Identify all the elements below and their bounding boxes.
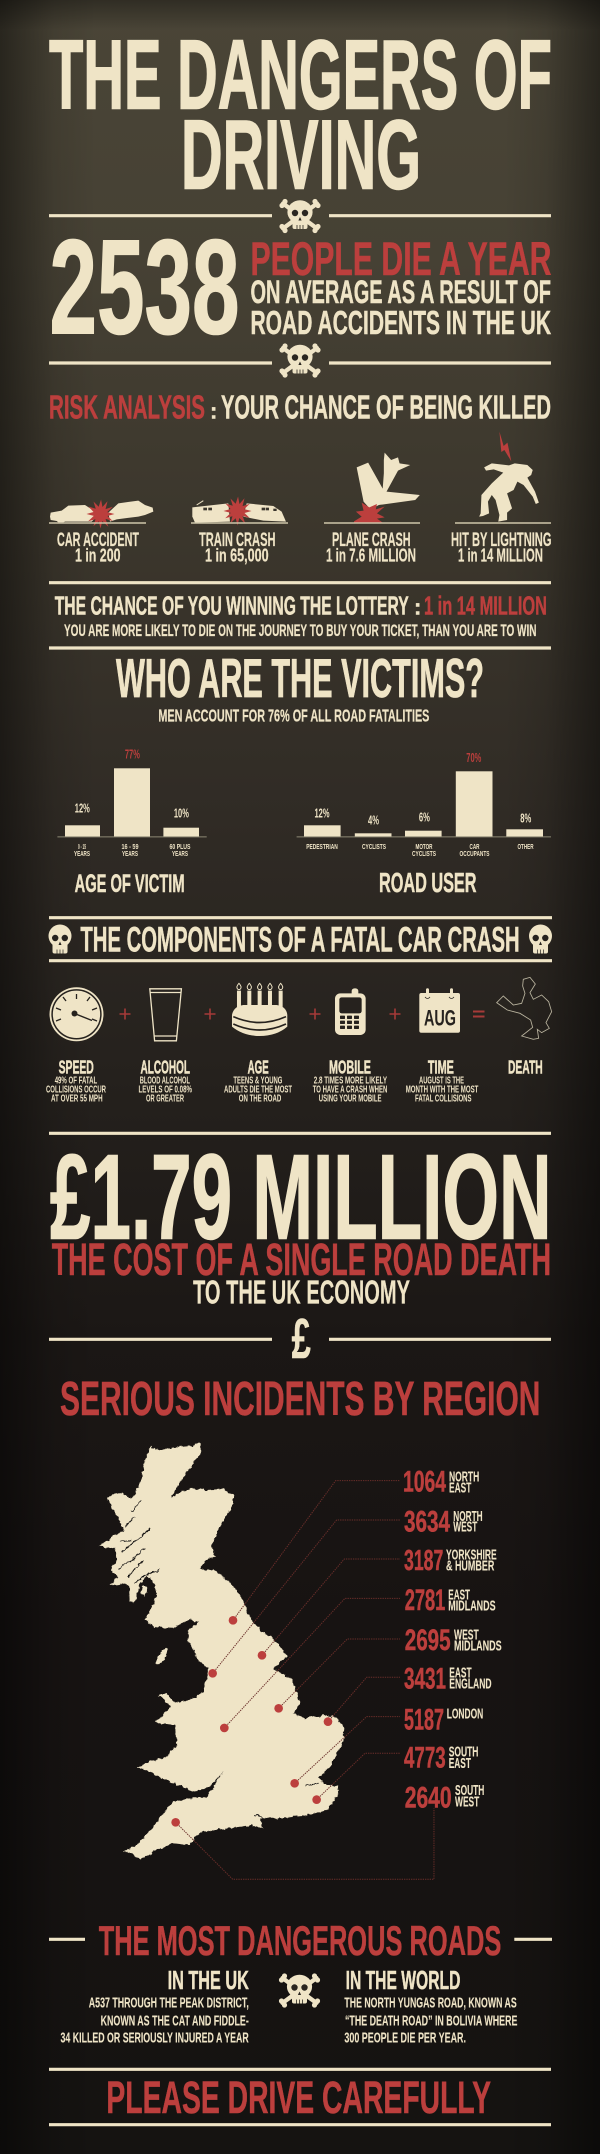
icon: skull right [529, 924, 552, 954]
title [49, 20, 552, 210]
label: 1 in 7.6 MILLION [326, 546, 416, 566]
label: CAR ACCIDENT [57, 529, 139, 551]
bar chart: road user: CYCLISTS [362, 842, 386, 851]
bar chart: age of victim: 0 - 15 [78, 842, 86, 851]
region: east midlands: MIDLANDS [448, 1599, 496, 1615]
heading: risk analysis: RISK ANALYSIS [49, 389, 205, 426]
bar chart: age of victim: YEARS [74, 849, 90, 858]
bar chart: age of victim: 16 - 59 [122, 842, 138, 851]
operator: plus [310, 1008, 320, 1020]
statistic: 2538 deaths [50, 211, 552, 362]
statistic: cost of a road death [50, 1130, 552, 1311]
dangerous road: in the UK: A537 THROUGH THE PEAK DISTRICT, [89, 1995, 249, 2011]
operator: plus [204, 1008, 216, 1020]
label: FATAL COLLISIONS [415, 1094, 472, 1105]
lottery comparison [55, 590, 547, 640]
region: north west: WEST [453, 1520, 477, 1536]
statistic: 2538 deaths: 2538 [50, 211, 240, 362]
icon: crashing train [191, 496, 288, 526]
statistic: cost of a road death: TO THE UK ECONOMY [193, 1274, 410, 1311]
icon: mobile phone [335, 988, 366, 1035]
region: east midlands: EAST [448, 1587, 470, 1603]
icon: pint glass [150, 989, 181, 1041]
region: east england: ENGLAND [449, 1677, 492, 1693]
region: south west: 2640 [405, 1781, 452, 1814]
bar chart: age of victim [57, 746, 207, 898]
dangerous road: in the UK [60, 1965, 249, 2047]
region: east england: EAST [449, 1665, 472, 1681]
region: east england: 3431 [404, 1663, 446, 1696]
label: 49% OF FATAL [55, 1075, 97, 1086]
label: MOBILE [329, 1057, 371, 1077]
label [57, 529, 139, 566]
chart title: AGE OF VICTIM [75, 870, 185, 898]
bar chart: road user: 8% [520, 811, 532, 826]
region: yorkshire and humber: 3187 [404, 1545, 443, 1577]
label: 1 in 65,000 [205, 546, 269, 566]
dangerous road: in the world: IN THE WORLD [346, 1965, 460, 1995]
label: ALCOHOL [140, 1057, 190, 1077]
region: south east: EAST [449, 1756, 471, 1772]
risk: car accident [49, 500, 153, 566]
label: 2.8 TIMES MORE LIKELY [314, 1075, 387, 1086]
heading: who are the victims: MEN ACCOUNT FOR 76% OF ALL ROAD FATALITIES [158, 706, 429, 726]
label: 1 in 14 MILLION [458, 546, 543, 566]
component: speed [46, 987, 106, 1105]
icon: pound sign: £ [292, 1307, 311, 1371]
map: Great Britain [98, 1443, 344, 1860]
region: london: 5187 [404, 1703, 444, 1736]
bar chart: road user: 4% [368, 812, 379, 827]
dangerous road: in the UK: IN THE UK [168, 1965, 249, 1995]
region: west midlands [405, 1624, 502, 1657]
label: AGE [248, 1057, 269, 1077]
chart title: ROAD USER [379, 867, 477, 898]
icon: birthday cake [232, 983, 287, 1036]
label [199, 529, 276, 566]
region: south east: SOUTH [449, 1745, 478, 1761]
title: DRIVING [181, 100, 421, 210]
bar chart: road user [297, 750, 551, 898]
component: age [224, 983, 292, 1105]
dangerous road: in the world: 300 PEOPLE DIE PER YEAR. [344, 2031, 466, 2047]
dangerous road: in the UK: 34 KILLED OR SERIOUSLY INJURED A YEAR [60, 2031, 249, 2047]
label [138, 1057, 192, 1105]
heading: risk analysis: : [210, 398, 217, 423]
component: mobile [313, 988, 387, 1105]
label: DEATH [508, 1057, 543, 1077]
region: yorkshire and humber: YORKSHIRE [446, 1547, 497, 1563]
label: AT OVER 55 MPH [51, 1094, 103, 1105]
region: north east: NORTH [449, 1470, 479, 1486]
risk: plane crash [324, 453, 420, 566]
divider with skull [49, 199, 551, 233]
label: MONTH WITH THE MOST [406, 1084, 478, 1095]
dangerous road: in the world [344, 1965, 518, 2047]
region: north west: 3634 [404, 1506, 450, 1539]
bar chart: road user: OCCUPANTS [460, 849, 490, 858]
bar chart: age of victim: YEARS [172, 849, 188, 858]
icon: skull and crossbones [279, 343, 321, 378]
label [406, 1057, 478, 1105]
label: TRAIN CRASH [199, 529, 276, 551]
icon: skull left [48, 924, 72, 954]
bar chart: age of victim: 10% [174, 805, 189, 820]
operator: plus [120, 1008, 130, 1020]
icon: crashing cars [49, 500, 153, 528]
chart: map of incidents by region [98, 1443, 502, 1879]
risk: train crash [191, 496, 288, 566]
label [451, 529, 552, 566]
region: yorkshire and humber: & HUMBER [446, 1559, 495, 1575]
bar chart: road user: OTHER [518, 842, 534, 851]
region: west midlands: 2695 [405, 1624, 451, 1657]
region: yorkshire and humber [404, 1545, 497, 1577]
label: TEENS & YOUNG [233, 1075, 282, 1086]
bar chart: road user: CYCLISTS [412, 849, 436, 858]
label: BLOOD ALCOHOL [140, 1075, 190, 1086]
operator: plus [390, 1008, 400, 1020]
bar chart: age of victim: 77% [125, 746, 140, 761]
label: COLLISIONS OCCUR [46, 1084, 106, 1095]
leader lines [171, 1481, 434, 1879]
icon: crashing plane [324, 453, 420, 523]
label: OR GREATER [146, 1094, 184, 1105]
dangerous road: in the UK: KNOWN AS THE CAT AND FIDDLE- [101, 2014, 249, 2030]
region markers [171, 1616, 332, 1827]
heading: who are the victims [116, 648, 484, 726]
icon: chalk body outline [497, 977, 552, 1039]
risk: hit by lightning [451, 432, 552, 566]
icon: skull and crossbones [279, 199, 321, 233]
bar chart: age of victim: 60 PLUS [170, 842, 191, 851]
region: west midlands: MIDLANDS [454, 1639, 502, 1655]
region: north east: 1064 [403, 1466, 446, 1499]
label: PLANE CRASH [332, 529, 411, 551]
bar chart: road user: 12% [314, 805, 330, 820]
operator: equals [473, 1012, 484, 1016]
region: north west: NORTH [453, 1509, 483, 1525]
label [313, 1057, 387, 1105]
bar chart: age of victim: YEARS [122, 849, 138, 858]
region: south east: 4773 [404, 1741, 446, 1774]
lottery comparison: : [414, 594, 421, 619]
bar chart: road user: PEDESTRIAN [306, 842, 338, 851]
label [224, 1057, 292, 1105]
region: south west: WEST [455, 1795, 479, 1811]
component: alcohol [138, 989, 192, 1105]
label: SPEED [59, 1057, 94, 1077]
label: TO HAVE A CRASH WHEN [313, 1084, 387, 1095]
label: LEVELS OF 0.08% [138, 1084, 192, 1095]
bar chart: road user: CAR [470, 842, 480, 851]
region: south west: SOUTH [455, 1783, 484, 1799]
label: ADULTS DIE THE MOST [224, 1084, 292, 1095]
label: TIME [428, 1057, 454, 1077]
heading: risk analysis [49, 389, 551, 426]
label: 1 in 200 [75, 546, 120, 566]
icon: skull and crossbones [279, 1973, 320, 2008]
region: west midlands: WEST [454, 1627, 479, 1643]
divider with skull [49, 343, 551, 378]
label [46, 1057, 106, 1105]
icon: speedometer [50, 987, 104, 1041]
icon: man struck by lightning [455, 432, 551, 523]
bar chart: road user: MOTOR [416, 842, 433, 851]
region: london: LONDON [447, 1706, 483, 1722]
label [326, 529, 416, 566]
bar chart: age of victim: 12% [75, 800, 90, 815]
bar chart: road user: 70% [466, 750, 482, 765]
label: USING YOUR MOBILE [319, 1094, 382, 1105]
component: time [406, 988, 478, 1105]
label: ON THE ROAD [239, 1094, 281, 1105]
icon: calendar: AUG [424, 1006, 456, 1031]
region: east midlands: 2781 [405, 1584, 445, 1617]
component: death [497, 977, 552, 1077]
label: AUGUST IS THE [419, 1075, 464, 1086]
region: north east: EAST [449, 1481, 471, 1497]
bar chart: road user: 6% [419, 809, 430, 824]
